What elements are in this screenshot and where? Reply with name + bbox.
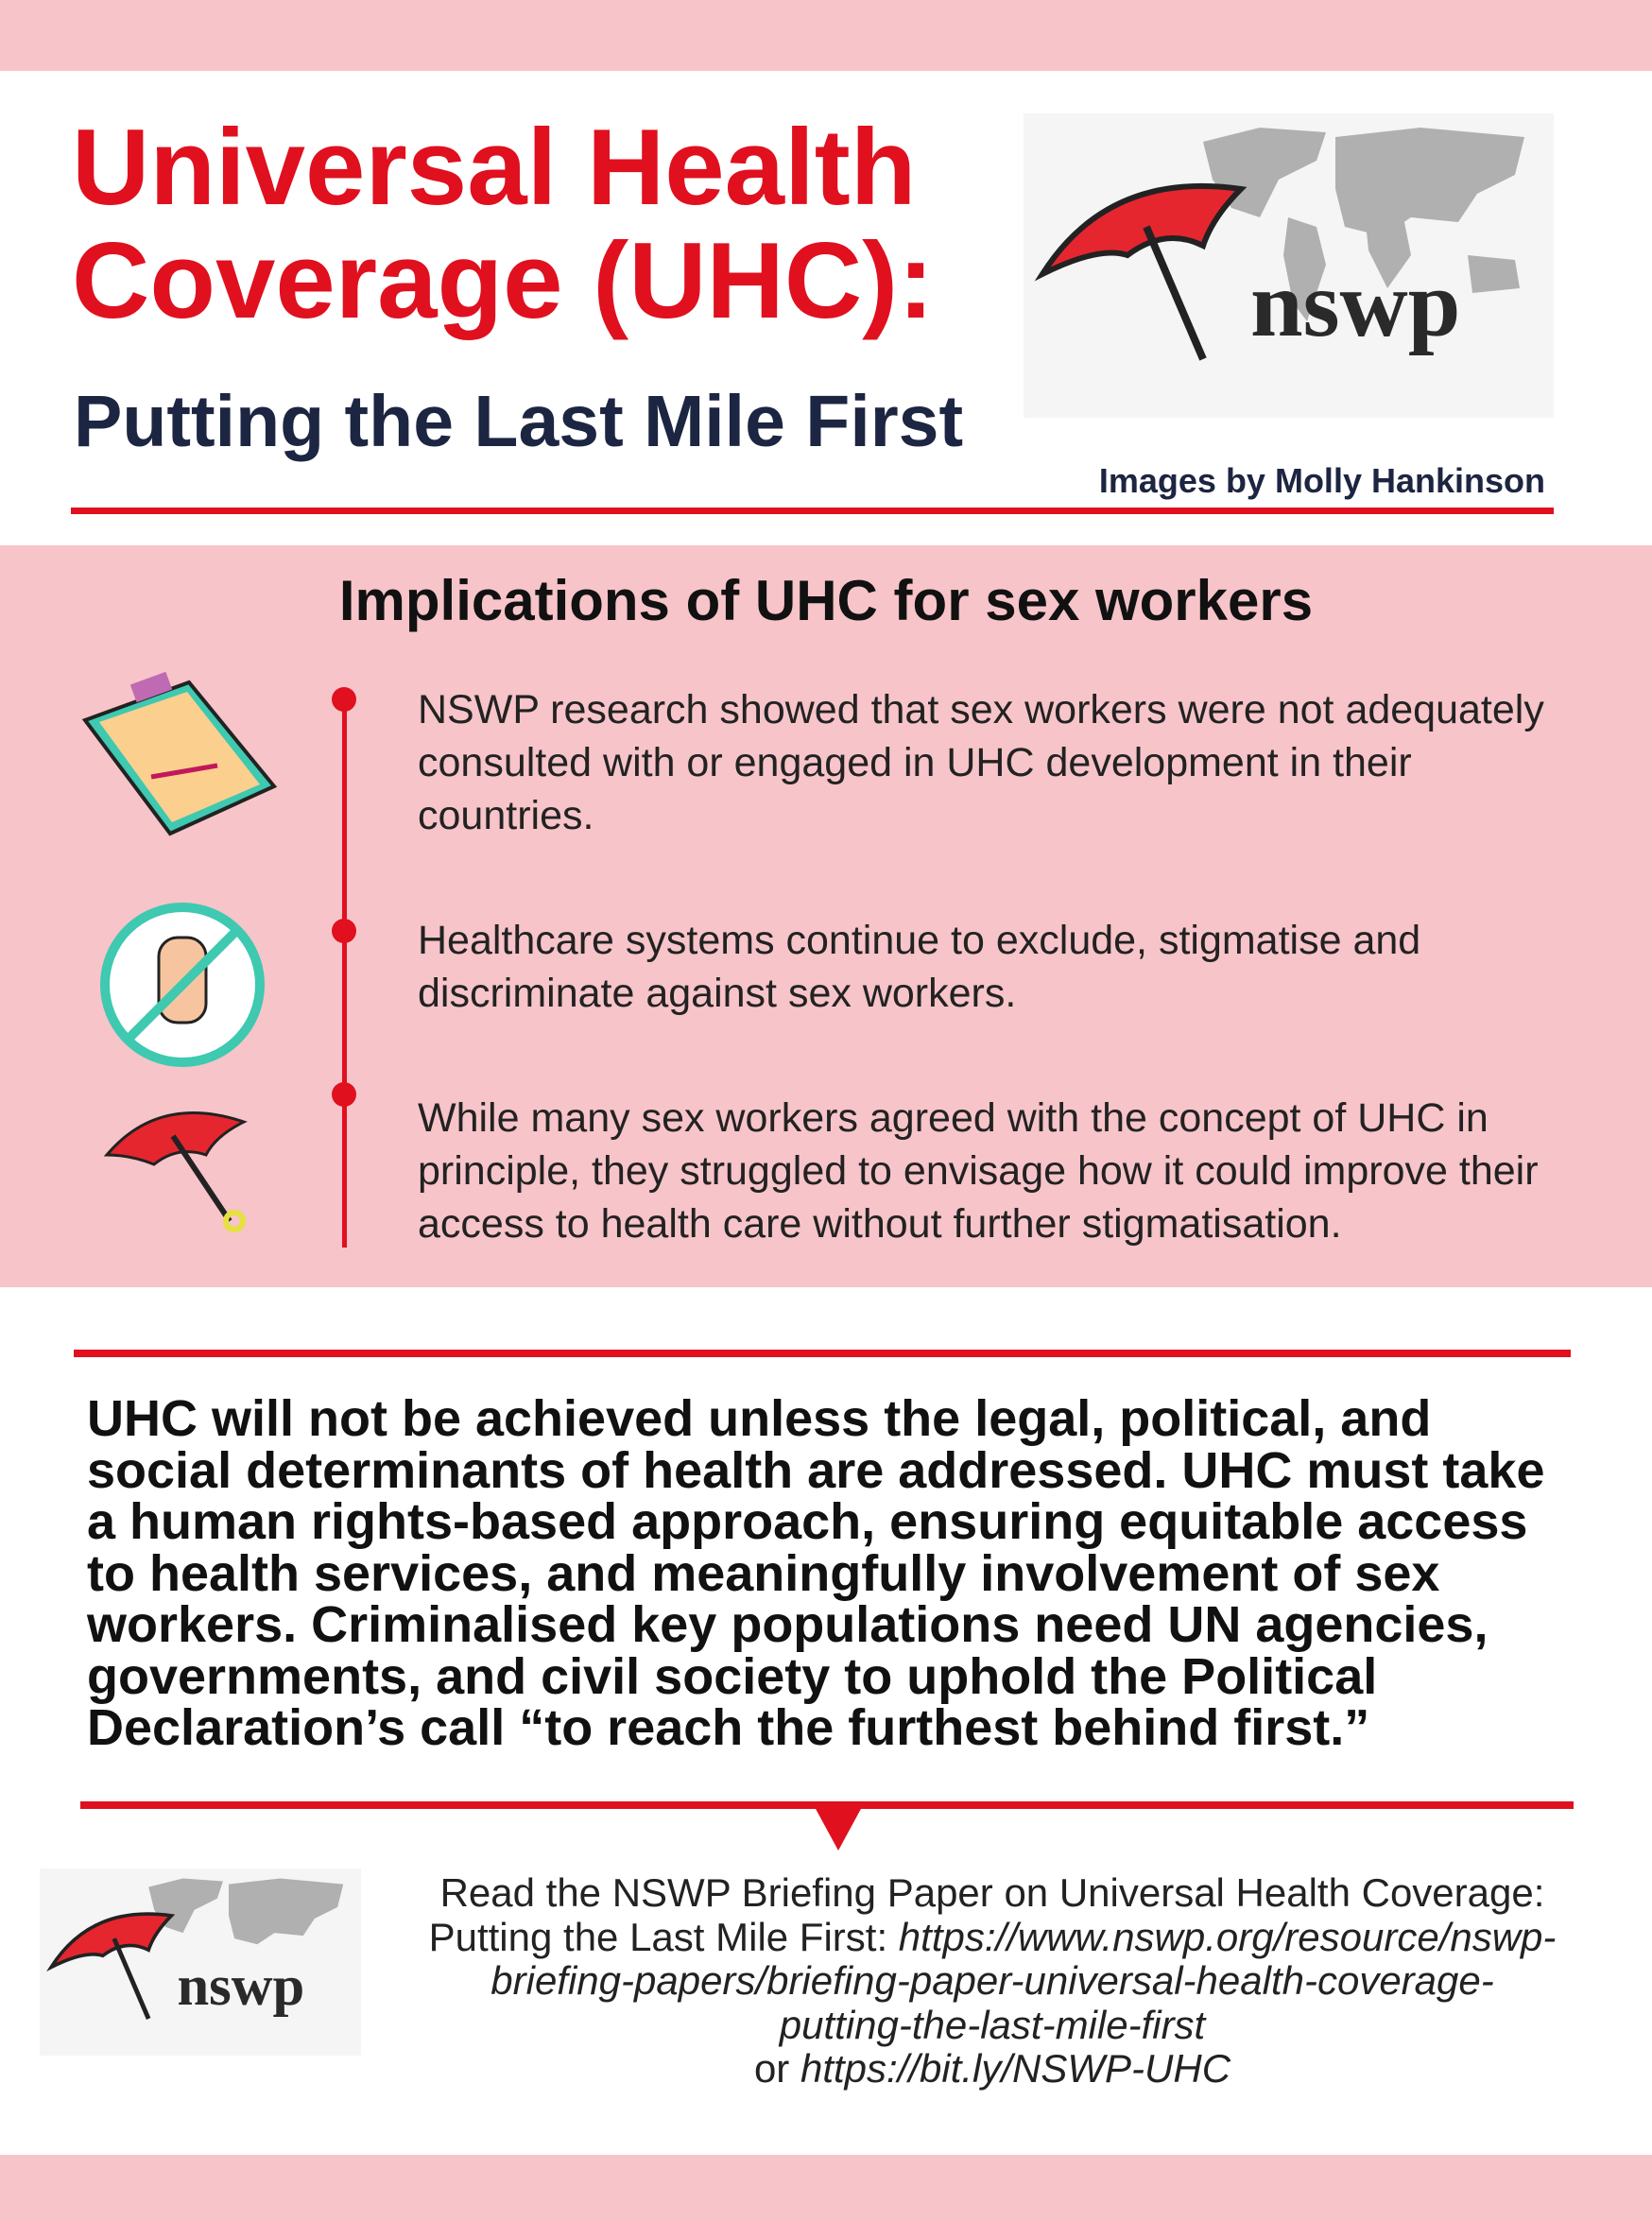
key message: social determinants of health are addressed. UHC must take: [87, 1442, 1544, 1499]
text 1: NSWP research showed that sex workers were not adequately: [418, 687, 1544, 732]
key message: UHC will not be achieved unless the legal, political, and: [87, 1390, 1431, 1447]
top band: [0, 0, 1652, 71]
text 3: access to health care without further stigmatisation.: [418, 1201, 1342, 1247]
text 1: consulted with or engaged in UHC development in their: [418, 740, 1412, 785]
small logo: [40, 1868, 361, 2056]
logo: nswp: nswp: [1250, 251, 1460, 356]
text 1: [418, 687, 1544, 838]
text 1: countries.: [418, 793, 594, 838]
text 2: discriminate against sex workers.: [418, 971, 1016, 1016]
key message: governments, and civil society to uphold the Political: [87, 1648, 1377, 1705]
key message: workers. Criminalised key populations need UN agencies,: [87, 1596, 1488, 1653]
key message: [87, 1390, 1544, 1756]
panel: implications: [0, 545, 1652, 1287]
icon: umbrella: [104, 1111, 248, 1232]
title: Universal Health: [72, 108, 916, 228]
title: Coverage (UHC):: [72, 221, 934, 341]
footer text: Read the NSWP Briefing Paper on Universal Health Coverage:: [440, 1870, 1544, 1915]
text 3: While many sex workers agreed with the concept of UHC in: [418, 1095, 1489, 1141]
subtitle: Putting the Last Mile First: [74, 381, 963, 462]
credit: Images by Molly Hankinson: [1099, 461, 1545, 500]
footer text: [429, 1870, 1556, 2091]
text 3: principle, they struggled to envisage how it could improve their: [418, 1148, 1539, 1194]
text 2: [418, 918, 1420, 1016]
key message: Declaration’s call “to reach the furthest behind first.”: [87, 1699, 1369, 1756]
text 2: Healthcare systems continue to exclude, stigmatise and: [418, 918, 1420, 963]
logo: nswp: [1024, 113, 1554, 418]
key message: to health services, and meaningfully involvement of sex: [87, 1544, 1439, 1601]
footer text: briefing-papers/briefing-paper-universal-health-coverage-: [490, 1958, 1494, 2003]
icon: no hand: [100, 903, 265, 1067]
key message: a human rights-based approach, ensuring equitable access: [87, 1493, 1527, 1550]
title: [72, 108, 934, 341]
footer text: putting-the-last-mile-first: [780, 2002, 1205, 2047]
small logo: nswp: [177, 1954, 304, 2018]
timeline: [342, 699, 347, 1248]
text 3: [418, 1095, 1539, 1247]
arrow: [816, 1809, 861, 1851]
heading: Implications of UHC for sex workers: [339, 569, 1313, 632]
bottom band: [0, 2155, 1652, 2221]
footer text: Putting the Last Mile First: https://www.nswp.org/resource/nswp-: [429, 1915, 1556, 1958]
icon: clipboard: [81, 671, 278, 835]
footer text: or https://bit.ly/NSWP-UHC: [754, 2046, 1230, 2091]
